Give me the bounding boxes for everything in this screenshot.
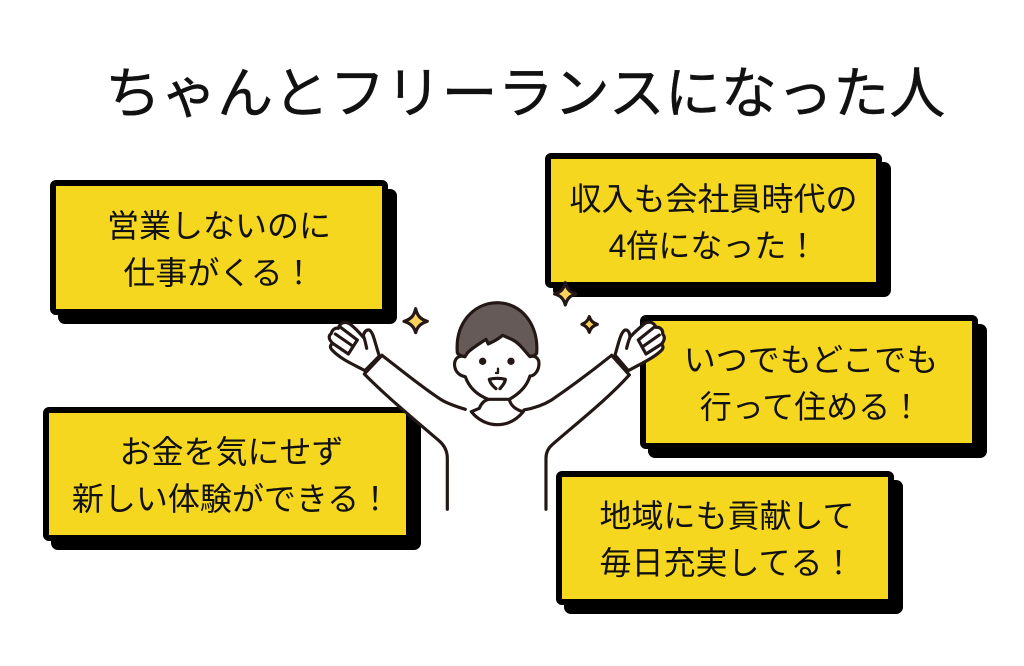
- text: live anywhere: [684, 342, 938, 425]
- icon: top sparkle: [555, 283, 576, 305]
- text: new experiences: お金を気にせず: [119, 434, 344, 470]
- text: income four times: 4倍になった！: [609, 228, 818, 264]
- neck and collar: [471, 399, 523, 425]
- text: new experiences: [72, 434, 391, 517]
- text: community contribution: 毎日充実してる！: [599, 545, 855, 581]
- text: work comes without sales: 仕事がくる！: [123, 254, 315, 290]
- text: new experiences: 新しい体験ができる！: [72, 481, 391, 517]
- panel: community contribution: [556, 471, 903, 614]
- icon: left hand: [329, 322, 379, 371]
- icon: face: [479, 358, 515, 389]
- text: live anywhere: いつでもどこでも: [684, 342, 938, 378]
- text: income four times: 収入も会社員時代の: [569, 180, 858, 216]
- text: work comes without sales: 営業しないのに: [107, 208, 331, 244]
- panel: work comes without sales: [50, 180, 397, 324]
- body fill: [364, 355, 629, 510]
- title: ちゃんとフリーランスになった人: [105, 62, 945, 125]
- text: work comes without sales: [107, 208, 331, 290]
- panel: new experiences: [43, 407, 421, 550]
- icon: large sparkle: [404, 309, 427, 333]
- panel: live anywhere: [640, 315, 987, 458]
- text: live anywhere: 行って住める！: [700, 389, 922, 425]
- text: income four times: [569, 180, 858, 264]
- text: community contribution: 地域にも貢献して: [599, 498, 855, 534]
- icon: head: [455, 303, 539, 399]
- panel: income four times: [545, 153, 891, 297]
- icon: right hand: [615, 322, 664, 371]
- left arm: [364, 355, 465, 509]
- right arm: [524, 355, 629, 509]
- icon: small sparkle: [582, 317, 597, 332]
- text: community contribution: [599, 498, 855, 581]
